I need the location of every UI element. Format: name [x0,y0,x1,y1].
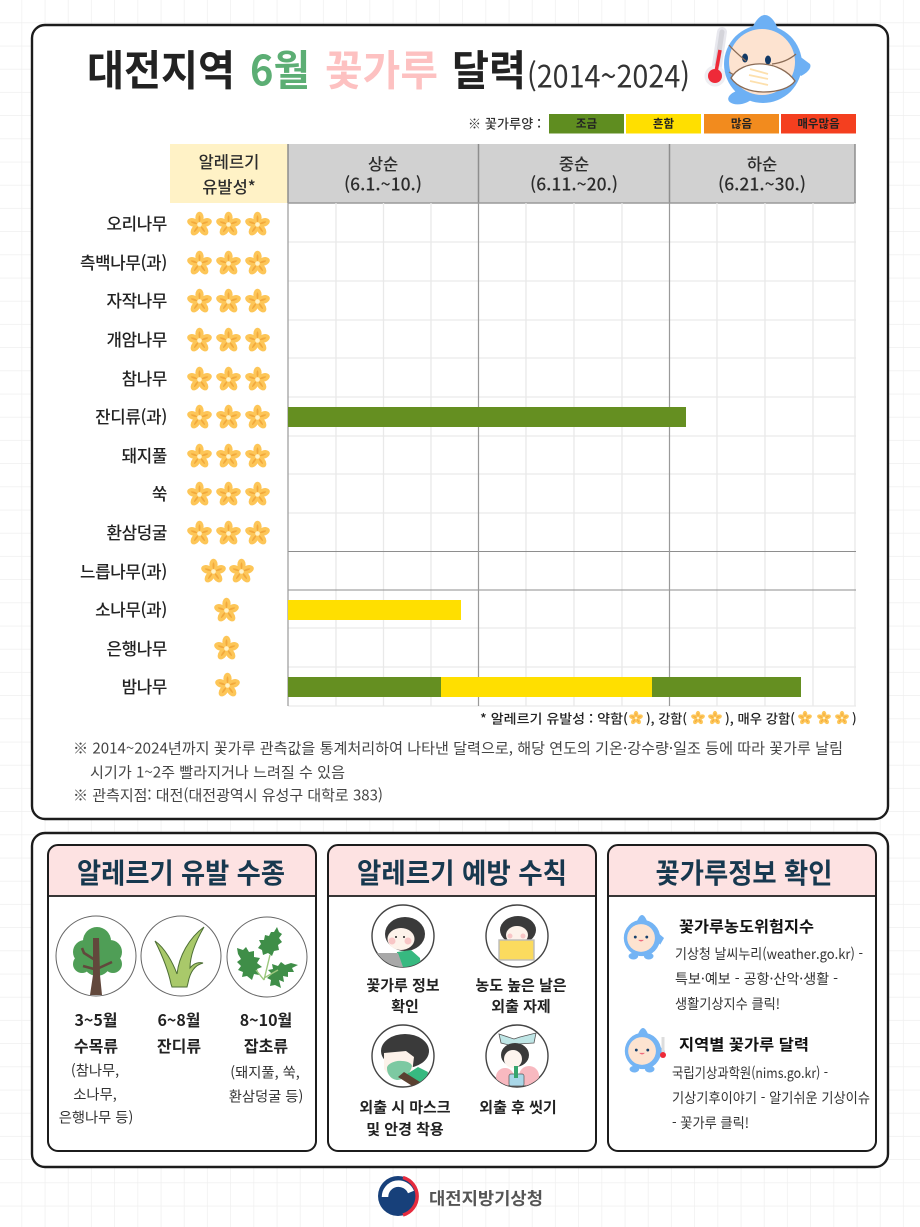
title: 꽃가루 [325,38,438,98]
footnotes: ※ 관측지점: 대전(대전광역시 유성구 대학로 383) [73,784,383,806]
allergy rating key: ) [852,708,857,728]
heading: 꽃가루정보 확인 [656,852,832,892]
info text: regional calendar: 지역별 꽃가루 달력 [679,1033,809,1055]
icon: grass [141,916,221,996]
title: 대전지역 [87,38,235,98]
legend: pollen amount: 많음 [731,116,752,132]
icon: tree [56,916,136,996]
allergy rating key: ), 매우 강함( [725,708,795,728]
tree labels: 쑥 [152,481,167,505]
icon: mascot with thermometer [625,1028,666,1073]
info text: risk index: 특보·예보 - 공항·산악·생활 - [675,969,838,989]
calendar table header: (6.21.~30.) [718,172,806,196]
species text: grass: 6~8월 [157,1007,201,1031]
calendar table header: 유발성* [202,174,256,198]
tip labels: 확인 [391,996,419,1016]
legend: pollen amount: 조금 [576,116,597,132]
tree labels: 측백나무(과) [80,250,167,274]
title: (2014~2024) [527,52,690,96]
icon: mascot small [624,915,664,960]
icon: person washing [486,1025,548,1087]
tree labels: 느릅나무(과) [80,559,167,583]
info text: regional calendar: 국립기상과학원(nims.go.kr) - [672,1063,828,1083]
legend: pollen amount: 흔함 [653,116,674,132]
allergy rating key: * 알레르기 유발성 : 약함( [480,708,628,728]
panel: pollen calendar [32,15,888,819]
bar: 잔디류 [288,407,686,427]
tree labels: 참나무 [122,366,167,390]
species text: trees: 은행나무 등) [59,1106,133,1128]
species text: weeds: 8~10월 [240,1007,292,1031]
panel: allergenic species [48,845,316,1151]
tip labels: 외출 후 씻기 [479,1096,557,1118]
panel: prevention tips [328,845,596,1151]
footnotes: 시기가 1~2주 빨라지거나 느려질 수 있음 [90,762,345,782]
tree labels: 잔디류(과) [95,404,167,428]
allergy rating key [480,708,857,728]
logo: agency name: 대전지방기상청 [429,1184,543,1210]
tree labels: 개암나무 [106,327,167,351]
calendar table header: 알레르기 [199,149,259,173]
calendar table header: (6.11.~20.) [530,172,618,196]
title: 6월 [250,38,310,98]
tip labels [359,974,567,1140]
calendar grid [288,203,856,706]
panel: pollen information [608,845,876,1151]
footnotes: ※ 2014~2024년까지 꽃가루 관측값을 통계처리하여 나타낸 달력으로, 해당 연도의 기온·강수량·일조 등에 따라 꽃가루 날림 [73,738,843,758]
tip labels: 외출 자제 [491,996,551,1016]
tree labels: 돼지풀 [122,443,167,467]
info text: risk index: 생활기상지수 클릭! [675,994,780,1014]
species text: grass [157,1007,201,1057]
info text: risk index [675,915,863,1014]
species text: trees [59,1007,133,1128]
calendar table header: 하순 [747,151,777,175]
icon: mascot with mask and thermometer [704,15,810,107]
allergy flower ratings [186,212,271,698]
tree labels [80,211,167,698]
species text: trees: 소나무, [73,1084,117,1104]
heading: 알레르기 예방 수칙 [357,852,567,892]
species text: trees: 수목류 [74,1033,118,1057]
info text: regional calendar [672,1033,870,1133]
legend: pollen amount [468,114,856,134]
title [87,38,690,98]
calendar table header [170,144,856,203]
legend: pollen amount: ※ 꽃가루양 : [468,114,541,132]
species text: weeds: 잡초류 [244,1033,288,1057]
species text: trees: 3~5월 [74,1007,118,1031]
tree labels: 은행나무 [106,636,167,660]
tip labels: 꽃가루 정보 [366,974,440,996]
species text: trees: (참나무, [71,1060,119,1080]
calendar table header: 중순 [559,151,589,175]
info text: regional calendar: 기상기후이야기 - 알기쉬운 기상이슈 [672,1088,870,1108]
icon: person with laptop [372,905,434,970]
tree labels: 오리나무 [106,211,167,235]
info text: regional calendar: - 꽃가루 클릭! [672,1113,749,1133]
species text: grass: 잔디류 [157,1033,201,1057]
bar: 소나무 [288,600,461,620]
species text: weeds: (돼지풀, 쑥, [230,1062,300,1082]
legend: pollen amount: 매우많음 [797,116,840,132]
title: 달력 [452,38,526,98]
bar: 밤나무 [288,677,801,697]
calendar table header: 상순 [368,151,398,175]
tree labels: 밤나무 [122,674,167,698]
tree labels: 자작나무 [106,288,167,312]
icon: person with mask [372,1025,434,1087]
tree labels: 환삼덩굴 [106,520,167,544]
tip labels: 및 안경 착용 [366,1118,444,1140]
allergy rating key: ), 강함( [646,708,687,728]
info text: risk index: 기상청 날씨누리(weather.go.kr) - [675,944,863,964]
icon: person behind window [486,905,548,967]
species text: weeds: 환삼덩굴 등) [229,1086,303,1106]
calendar table header: (6.1.~10.) [344,172,422,196]
icon: weed leaf [227,917,307,997]
logo: government emblem [378,1176,418,1216]
species text: weeds [229,1007,303,1106]
panel: bottom container [32,833,888,1167]
footnotes [73,738,843,806]
tree labels: 소나무(과) [95,597,167,621]
info text: risk index: 꽃가루농도위험지수 [679,915,814,937]
tip labels: 외출 시 마스크 [359,1096,451,1118]
tip labels: 농도 높은 날은 [475,974,567,996]
heading: 알레르기 유발 수종 [77,852,285,892]
